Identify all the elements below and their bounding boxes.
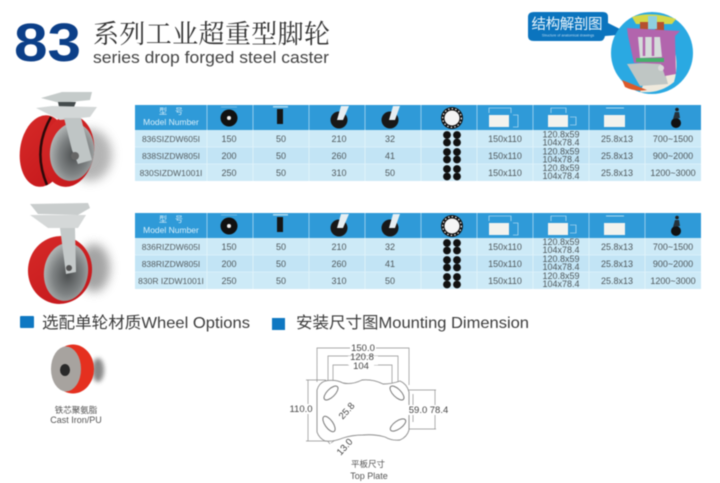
product table: single wheel series: 104x78.4 [542,262,580,272]
product table: single wheel series: 838RIZDW805I [142,259,200,269]
mounting dimension diagram: 59.0 [409,405,427,416]
product table: double wheel series: 700~1500 [653,134,693,144]
product table: double wheel series: 260 [331,151,347,161]
product table: double wheel series: 50 [385,168,395,178]
product table: double wheel series: 104x78.4 [542,138,580,148]
product table: double wheel series: 150x110 [488,168,522,178]
product table: single wheel series: 25.8x13 [601,259,633,269]
product table: double wheel series: 120.8x59 [542,130,580,140]
title: series drop forged steel caster [93,48,329,67]
product table: single wheel series: 型 号 [159,215,183,224]
product table: double wheel series: 250 [221,168,237,178]
mounting dimension diagram: 13.0 [335,437,355,458]
callout: structure cutaway label: Structure of anatomical drawings [542,34,594,38]
title [93,14,330,67]
product table: single wheel series: 120.8x59 [542,271,580,281]
product table: single wheel series: 120.8x59 [542,237,580,247]
product table: double wheel series: 836SIZDW605I [142,134,200,144]
product table: double wheel series: 50 [276,151,286,161]
wheel option: cast iron / PU: Cast Iron/PU [50,415,102,425]
product table: single wheel series: 32 [385,242,395,252]
top plate caption: 平板尺寸 [351,459,385,469]
product table: double wheel series: Model Number [143,117,199,127]
product table: double wheel series: 104x78.4 [542,154,580,164]
heading: wheel options: 选配单轮材质Wheel Options [42,314,250,332]
product table: single wheel series: 1200~3000 [650,276,696,286]
top plate caption: Top Plate [350,471,388,481]
caster photo: double wheel [15,92,112,190]
product table: double wheel series: 型 号 [159,107,183,116]
wheel option: cast iron / PU [50,344,104,425]
product table: single wheel series: 210 [331,242,347,252]
product table: single wheel series: 830R IZDW1001I [138,276,204,286]
product table: single wheel series: 25.8x13 [601,242,633,252]
icon: cutaway caster illustration [611,12,693,94]
product table: single wheel series: 150x110 [488,242,522,252]
product table: single wheel series: Model Number [143,225,199,235]
product table: single wheel series: 41 [385,259,395,269]
mounting dimension diagram: 150.0 [351,343,375,354]
product table: single wheel series: 900~2000 [653,259,693,269]
product table: double wheel series: 104x78.4 [542,171,580,181]
product table: double wheel series: 25.8x13 [601,151,633,161]
product table: single wheel series: 836RIZDW605I [142,242,200,252]
product table: double wheel series: 830SIZDW1001I [140,168,202,178]
product table: single wheel series: 50 [276,242,286,252]
mounting dimension diagram: 110.0 [289,404,313,415]
product table: double wheel series: 120.8x59 [542,146,580,156]
product table: single wheel series: 260 [331,259,347,269]
top plate caption [350,459,388,481]
product table: double wheel series: 1200~3000 [650,168,696,178]
series number: 83 [14,13,81,73]
product table: double wheel series: 32 [385,134,395,144]
product table: single wheel series: 150x110 [488,259,522,269]
product table: single wheel series: 250 [221,276,237,286]
product table: double wheel series: 120.8x59 [542,163,580,173]
mounting dimension diagram [289,343,452,458]
product table: double wheel series: 41 [385,151,395,161]
mounting dimension diagram: 25.8 [337,401,357,422]
callout: structure cutaway label [528,12,630,41]
product table: double wheel series: 900~2000 [653,151,693,161]
mounting dimension diagram: 78.4 [430,405,448,416]
product table: single wheel series: 310 [331,276,347,286]
product table: single wheel series: 150 [221,242,237,252]
product table: double wheel series: 150x110 [488,151,522,161]
wheel option: cast iron / PU: 铁芯聚氨脂 [55,405,98,415]
product table: double wheel series [135,105,701,181]
product table: double wheel series: 25.8x13 [601,134,633,144]
product table: single wheel series: 50 [385,276,395,286]
caster photo: single wheel [23,203,110,309]
callout: structure cutaway label: 结构解剖图 [532,16,602,33]
product table: single wheel series: 104x78.4 [542,279,580,289]
mounting dimension diagram: 104 [353,361,369,372]
product table: single wheel series: 25.8x13 [601,276,633,286]
product table: single wheel series: 200 [221,259,237,269]
product table: single wheel series: 50 [276,276,286,286]
product table: double wheel series: 310 [331,168,347,178]
product table: double wheel series: 50 [276,134,286,144]
product table: single wheel series: 104x78.4 [542,245,580,255]
product table: single wheel series: 700~1500 [653,242,693,252]
product table: double wheel series: 200 [221,151,237,161]
product table: single wheel series [135,213,701,289]
product table: double wheel series: 25.8x13 [601,168,633,178]
product table: single wheel series: 120.8x59 [542,254,580,264]
product table: double wheel series: 150x110 [488,134,522,144]
product table: double wheel series: 838SIZDW805I [142,151,200,161]
heading: mounting dimension: 安装尺寸图Mounting Dimension [296,314,529,332]
product table: double wheel series: 150 [221,134,237,144]
product table: double wheel series: 210 [331,134,347,144]
product table: single wheel series: 50 [276,259,286,269]
title: 系列工业超重型脚轮 [93,14,330,51]
product table: double wheel series: 50 [276,168,286,178]
mounting dimension diagram: 120.8 [350,352,374,363]
product table: single wheel series: 150x110 [488,276,522,286]
